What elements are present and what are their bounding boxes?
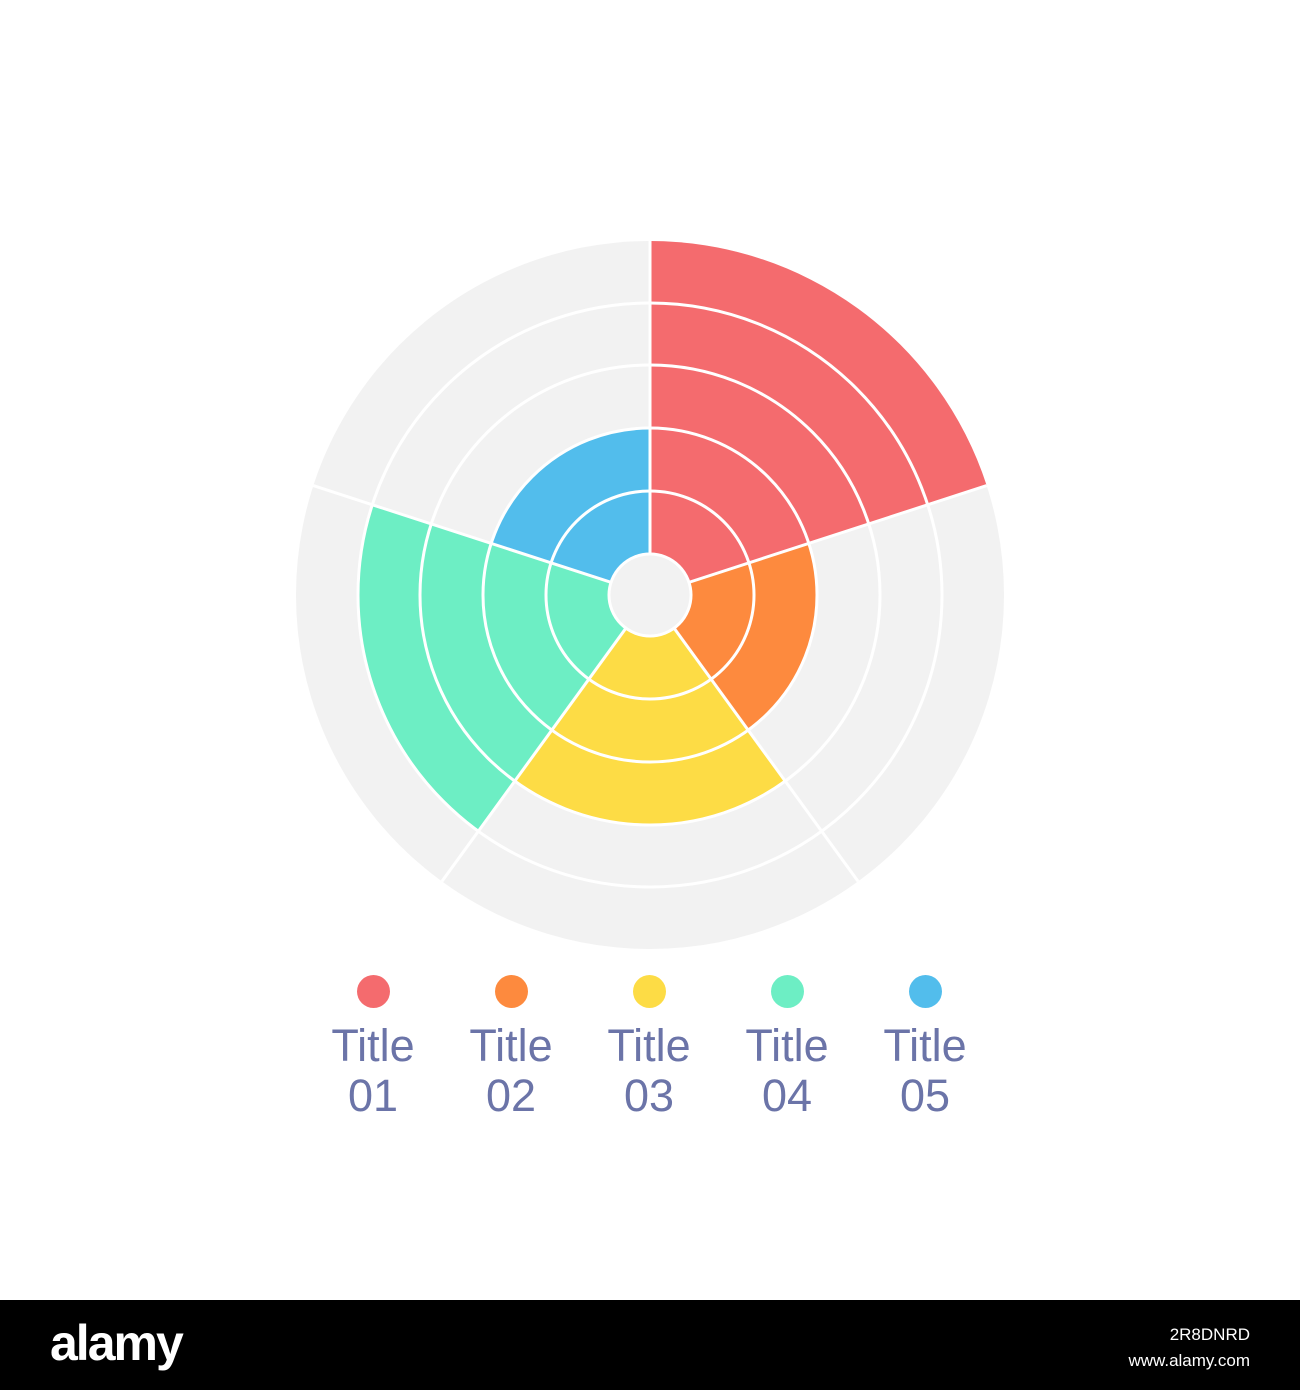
- image id: www.alamy.com: [1128, 1351, 1250, 1370]
- sector: title 03 yellow: [515, 595, 785, 825]
- image id: 2R8DNRD: [1170, 1325, 1250, 1344]
- legend: title 02: Title: [469, 1020, 553, 1071]
- logo: alamy: [50, 1315, 182, 1371]
- legend: title 03: [607, 975, 691, 1121]
- legend: title 01: 01: [348, 1070, 398, 1121]
- legend: title 01: Title: [331, 1020, 415, 1071]
- sector: title 05 blue: [491, 428, 650, 595]
- footer bar: [0, 1300, 1300, 1390]
- legend: title 02: [469, 975, 553, 1121]
- legend: title 04: [745, 975, 829, 1121]
- legend: title 05: 05: [900, 1070, 950, 1121]
- legend: title 05: [883, 975, 967, 1121]
- legend: title 02: 02: [486, 1070, 536, 1121]
- sector: title 02 orange: [650, 543, 817, 730]
- legend: title 05: Title: [883, 1020, 967, 1071]
- legend: title 04: 04: [762, 1070, 812, 1121]
- radial chart: [296, 241, 1004, 949]
- sector: title 01 red: [650, 241, 987, 595]
- image id: [1128, 1325, 1250, 1370]
- legend: title 04: Title: [745, 1020, 829, 1071]
- legend: title 03: Title: [607, 1020, 691, 1071]
- legend: title 03: 03: [624, 1070, 674, 1121]
- legend: title 01: [331, 975, 415, 1121]
- sector: title 04 teal: [358, 505, 650, 831]
